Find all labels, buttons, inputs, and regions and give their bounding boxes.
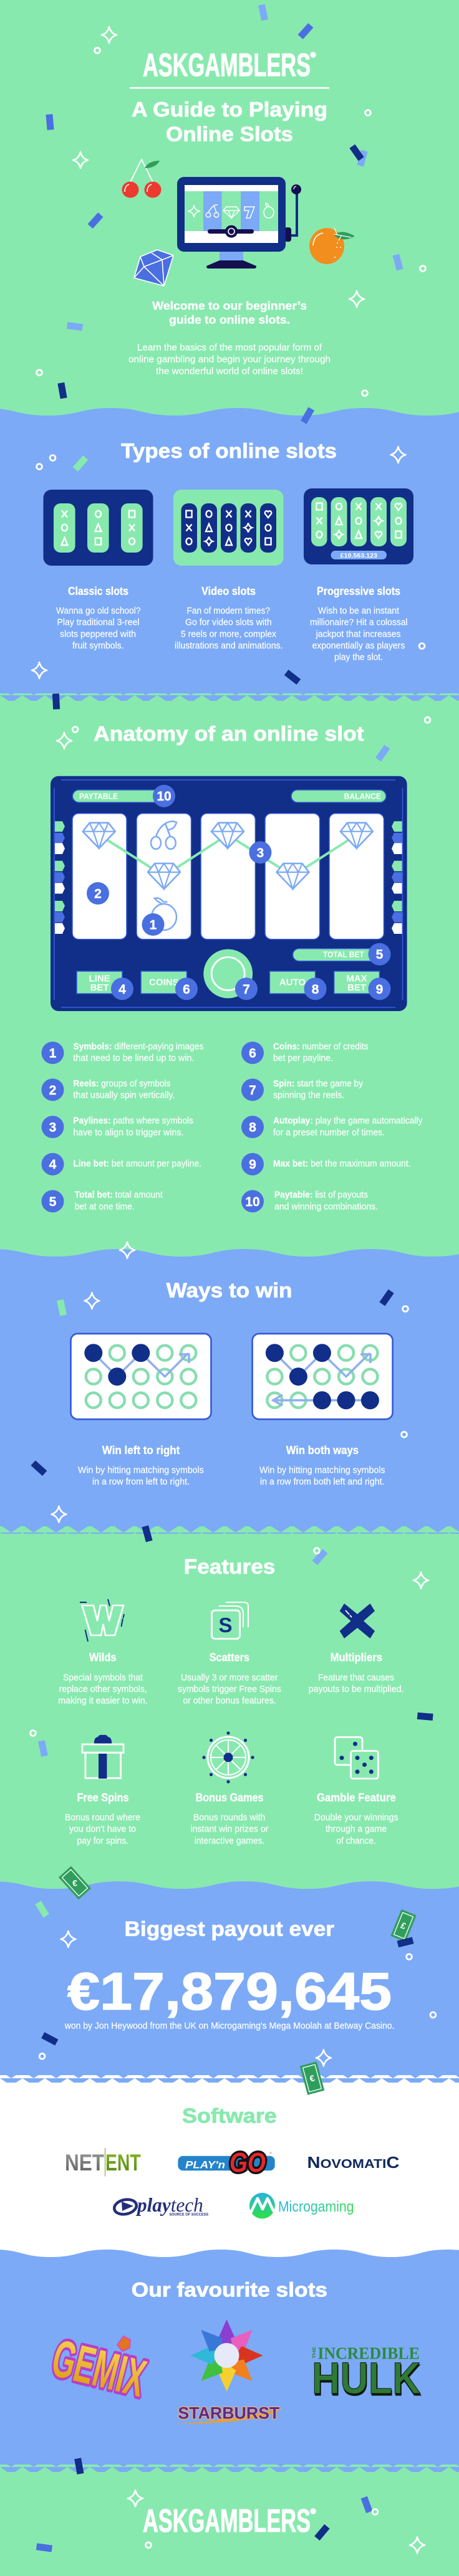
text: wilds: [58, 1652, 148, 1706]
icon: scatters: [212, 1602, 248, 1638]
text: both ways: in a row from both left and right.: [260, 1477, 384, 1487]
buttons: [77, 971, 379, 994]
badges: 3: [257, 846, 264, 860]
text: bonus games: instant win prizes or: [191, 1825, 269, 1835]
text: classic slots: slots peppered with: [60, 629, 136, 639]
logo: Starburst star: [191, 2319, 263, 2392]
legend: numbered list: 7: [249, 1083, 256, 1098]
legend: numbered list: and winning combinations.: [274, 1202, 378, 1212]
confetti: types: [32, 407, 425, 710]
heading: Features: [184, 1555, 275, 1578]
text: free spins: Bonus round where: [65, 1813, 140, 1823]
buttons: MAX: [346, 974, 367, 984]
panel: footer: [36, 2458, 425, 2553]
confetti: ways: [31, 1290, 408, 1542]
logo: Incredible Hulk: HULK: [312, 2354, 420, 2403]
icon: free spins: [82, 1735, 123, 1779]
intro text: Learn the basics of the most popular form of: [137, 343, 322, 353]
badges: [87, 785, 390, 1000]
badges: 1: [150, 918, 157, 932]
text: both ways: Win both ways: [286, 1444, 359, 1457]
legend: numbered list: 6: [249, 1047, 256, 1060]
legend: numbered list: 1: [49, 1047, 57, 1060]
panel: our favourite slots: [47, 2278, 420, 2424]
legend: numbered list: Symbols: different-paying images: [73, 1042, 203, 1052]
text: classic slots: fruit symbols.: [72, 641, 124, 651]
text: video slots: Go for video slots with: [185, 618, 272, 628]
legend: numbered list: that usually spin vertically.: [73, 1091, 175, 1101]
title: A Guide to Playing: [132, 98, 327, 121]
card: both ways: [253, 1334, 393, 1419]
card: progressive slots: £10.563.123: [341, 552, 377, 559]
balance pill: [291, 790, 386, 802]
text: video slots: [175, 585, 283, 651]
confetti: footer: [36, 2458, 425, 2553]
text: wilds: Wilds: [89, 1652, 116, 1664]
badges: 10: [157, 789, 172, 804]
text: video slots: illustrations and animations.: [175, 641, 283, 651]
heading: Anatomy of an online slot: [94, 722, 364, 745]
text: progressive slots: exponentially as players: [312, 641, 405, 651]
legend: numbered list: have to align to trigger wins.: [73, 1128, 183, 1138]
text: video slots: Fan of modern times?: [187, 606, 270, 616]
logo: Starburst wordmark: STARBURST: [178, 2404, 280, 2423]
text: gamble feature: Gamble Feature: [317, 1792, 396, 1804]
icon: apple: [152, 898, 176, 930]
legend: numbered list: Autoplay: play the game automatically: [273, 1116, 423, 1126]
logo: Gemix: GEMIX: [47, 2328, 152, 2408]
logo: Gemix: [47, 2328, 152, 2408]
card: video slots: [173, 490, 283, 566]
legend: numbered list: for a preset number of times.: [273, 1128, 385, 1138]
text: multipliers: [309, 1652, 403, 1694]
text: multipliers: Multipliers: [331, 1652, 382, 1664]
text: wilds: replace other symbols,: [59, 1685, 147, 1694]
icon: banknote pound: £: [399, 1920, 408, 1931]
total bet pill: [293, 949, 378, 961]
logo: Novomatic: NOVOMATI C: [307, 2153, 400, 2172]
text: progressive slots: millionaire? Hit a colossal: [310, 618, 408, 628]
total bet pill: TOTAL BET: [323, 950, 364, 959]
text: video slots: Video slots: [201, 585, 256, 597]
heading: Our favourite slots: [132, 2278, 327, 2301]
balance pill: BALANCE: [344, 792, 381, 801]
card: classic slots: [44, 490, 153, 566]
icon: gamble feature: [335, 1737, 378, 1779]
legend: numbered list: Paylines: paths where symbols: [73, 1116, 193, 1126]
legend: numbered list: 3: [49, 1120, 56, 1135]
logo: Playtech: playtech: [135, 2193, 203, 2216]
badges: 8: [312, 982, 319, 997]
text: wilds: making it easier to win.: [58, 1696, 148, 1706]
legend: numbered list: 10: [245, 1195, 260, 1209]
badges: 5: [376, 948, 384, 962]
text: progressive slots: Progressive slots: [317, 585, 400, 597]
legend: numbered list: spinning the reels.: [273, 1091, 344, 1101]
text: both ways: Win by hitting matching symbols: [259, 1465, 385, 1475]
badges: 7: [243, 982, 250, 997]
legend: numbered list: Max bet: bet the maximum amount.: [273, 1159, 411, 1169]
intro text: [128, 343, 331, 376]
intro text: the wonderful world of online slots!: [156, 366, 303, 376]
icon: slot machine: [177, 177, 301, 269]
panel: features: [31, 1548, 433, 1846]
legend: numbered list: bet at one time.: [75, 1202, 135, 1212]
icon: bonus games: [202, 1731, 254, 1784]
logo: [143, 2503, 316, 2539]
legend: numbered list: bet per payline.: [273, 1053, 333, 1063]
diagram: slot machine anatomy: [51, 776, 407, 1011]
buttons: AUTO: [279, 977, 306, 988]
heading: Software: [182, 2104, 277, 2127]
text: scatters: Usually 3 or more scatter: [181, 1673, 278, 1683]
panel: types of online slots: [32, 407, 425, 710]
logo: NetEnt: NET: [65, 2150, 104, 2175]
panel: biggest payout: [35, 1866, 436, 2095]
heading: Biggest payout ever: [125, 1917, 334, 1940]
text: bonus games: Bonus Games: [196, 1792, 263, 1804]
intro heading: [152, 300, 307, 326]
icon: banknote pound: [390, 1909, 417, 1942]
text: progressive slots: Wish to be an instant: [318, 606, 399, 616]
text: progressive slots: jackpot that increases: [316, 629, 401, 639]
text: free spins: you don't have to: [69, 1825, 136, 1835]
logo: NetEnt: ENT: [105, 2150, 141, 2175]
text: left to right: [78, 1444, 204, 1487]
legend: numbered list: Reels: groups of symbols: [73, 1079, 170, 1089]
buttons: LINE: [89, 974, 110, 984]
buttons: BET: [347, 982, 366, 993]
payout caption: won by Jon Heywood from the UK on Microgaming's Mega Moolah at Betway Casino.: [64, 2022, 394, 2032]
text: scatters: symbols trigger Free Spins: [178, 1685, 281, 1694]
text: bonus games: interactive games.: [195, 1836, 264, 1846]
icon: banknote euro: €: [72, 1878, 77, 1888]
text: video slots: 5 reels or more, complex: [181, 629, 277, 639]
text: classic slots: [56, 585, 141, 651]
confetti: payout: [35, 1901, 436, 2066]
icon: gem: [134, 250, 173, 286]
text: both ways: [259, 1444, 385, 1487]
text: free spins: Free Spins: [77, 1792, 129, 1804]
intro heading: guide to online slots.: [169, 314, 290, 326]
text: multipliers: Feature that causes: [318, 1673, 394, 1683]
logo: Playtech: [113, 2193, 209, 2217]
legend: numbered list: 8: [249, 1120, 256, 1135]
logo: Play'n GO: PLAY'n: [185, 2159, 225, 2170]
logo: Play'n GO: [178, 2147, 275, 2178]
text: gamble feature: of chance.: [336, 1836, 376, 1846]
icon: multipliers: [340, 1604, 375, 1638]
heading: Ways to win: [167, 1278, 292, 1301]
panel: ways to win: [31, 1278, 408, 1542]
payline: [99, 835, 357, 876]
paytable pill: [72, 790, 160, 802]
title: [132, 98, 327, 146]
icon: scatters: S: [218, 1614, 233, 1637]
text: scatters: Scatters: [210, 1652, 249, 1664]
icon: cherry: [151, 821, 176, 849]
logo: Play'n GO: ®: [269, 2151, 272, 2155]
icon: banknote euro lower: €: [309, 2073, 316, 2084]
logo: ASKGAMBLERS: [143, 2503, 311, 2539]
text: gamble feature: Double your winnings: [314, 1813, 398, 1823]
legend: numbered list: that need to be lined up to win.: [73, 1053, 194, 1063]
legend: numbered list: Spin: start the game by: [273, 1079, 364, 1089]
badges: 9: [376, 982, 383, 997]
text: classic slots: Play traditional 3-reel: [57, 618, 140, 628]
text: free spins: [65, 1792, 140, 1846]
icon: banknote euro lower: [300, 2061, 324, 2095]
intro text: online gambling and begin your journey through: [128, 355, 331, 365]
logo: Playtech: SOURCE OF SUCCESS: [169, 2213, 209, 2217]
card: progressive slots: [304, 488, 413, 564]
legend: numbered list: 4: [49, 1157, 57, 1172]
legend: numbered list: [41, 1042, 423, 1212]
reels: [72, 814, 384, 939]
icon: wilds: [80, 1599, 124, 1642]
legend: numbered list: Total bet: total amount: [75, 1191, 163, 1200]
side tabs: [55, 821, 402, 934]
buttons: COINS: [149, 977, 179, 988]
text: free spins: pay for spins.: [77, 1836, 128, 1846]
text: progressive slots: play the slot.: [334, 653, 383, 663]
logo: Microgaming: [249, 2193, 354, 2219]
text: left to right: Win left to right: [102, 1444, 180, 1457]
logo: NetEnt: [65, 2148, 141, 2177]
legend: numbered list: 2: [49, 1083, 56, 1098]
paytable pill: PAYTABLE: [79, 792, 118, 801]
text: left to right: in a row from left to right.: [92, 1477, 190, 1487]
spin button: [203, 949, 253, 998]
card: left to right: [71, 1334, 211, 1419]
badges: 4: [118, 982, 126, 997]
text: gamble feature: through a game: [326, 1825, 387, 1835]
text: progressive slots: [310, 585, 408, 663]
text: bonus games: Bonus rounds with: [193, 1813, 265, 1823]
confetti: anatomy: [57, 717, 430, 1258]
text: classic slots: Classic slots: [68, 585, 128, 597]
text: classic slots: Wanna go old school?: [56, 606, 141, 616]
badges: 2: [94, 887, 102, 901]
text: left to right: Win by hitting matching symbols: [78, 1465, 204, 1475]
legend: numbered list: 5: [49, 1195, 57, 1209]
text: gamble feature: [314, 1792, 398, 1846]
diamonds: [83, 823, 373, 889]
text: wilds: Special symbols that: [63, 1673, 143, 1683]
logo: Play'n GO: GO: [230, 2147, 266, 2178]
legend: numbered list: Coins: number of credits: [273, 1042, 369, 1052]
legend: numbered list: Line bet: bet amount per payline.: [73, 1159, 201, 1169]
intro heading: Welcome to our beginner’s: [152, 300, 307, 312]
icon: cherries: [122, 159, 161, 198]
text: scatters: [178, 1652, 281, 1706]
logo: Incredible Hulk: INCREDIBLE: [317, 2344, 420, 2363]
confetti: features: [31, 1548, 433, 1757]
confetti piece on note: [397, 1937, 413, 1947]
heading: Types of online slots: [121, 439, 337, 462]
legend: numbered list: 9: [249, 1157, 256, 1172]
panel: software: [65, 2104, 400, 2219]
confetti: hero: [37, 4, 425, 399]
logo: ASKGAMBLERS: [143, 47, 311, 83]
text: multipliers: payouts to be multiplied.: [309, 1685, 403, 1694]
panel: anatomy of an online slot: [41, 717, 430, 1258]
badges: 6: [183, 982, 190, 997]
text: bonus games: [191, 1792, 269, 1846]
buttons: BET: [90, 982, 109, 993]
panel: hero: [37, 4, 425, 399]
payout amount: €17,879,645: [67, 1962, 392, 2021]
logo: Microgaming: Microgaming: [278, 2198, 354, 2215]
title: Online Slots: [166, 122, 293, 146]
legend: numbered list: Paytable: list of payouts: [274, 1191, 368, 1200]
text: scatters: or other bonus features.: [183, 1696, 276, 1706]
logo: Incredible Hulk: THE: [312, 2347, 317, 2359]
icon: orange: [309, 228, 355, 264]
icon: banknote euro: [59, 1866, 91, 1899]
logo: [143, 47, 316, 83]
divider: [130, 87, 329, 88]
